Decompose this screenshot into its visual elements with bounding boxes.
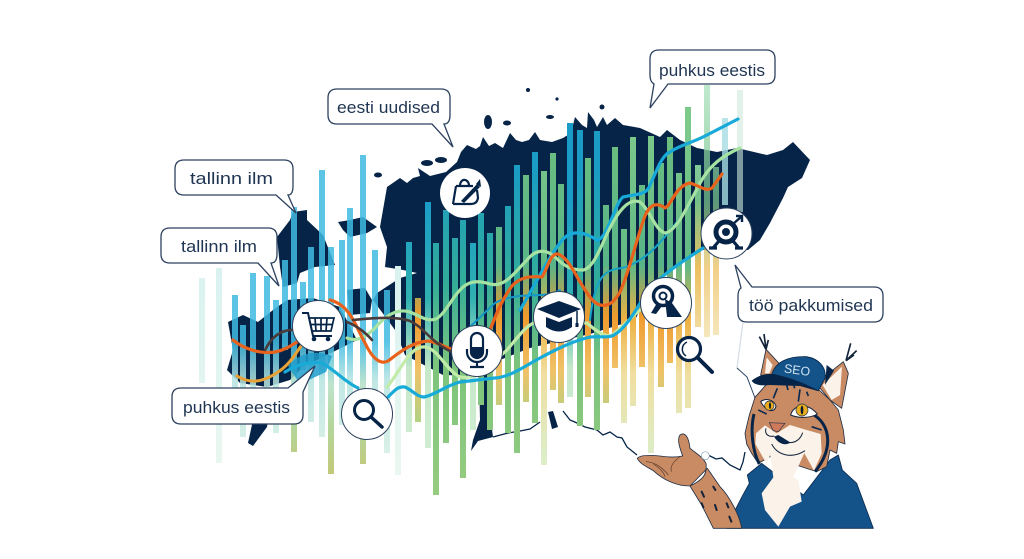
- lynx: shirt: [727, 455, 873, 528]
- map: islets: [374, 88, 604, 429]
- map: mainland: [373, 112, 810, 451]
- callout: puhkus eestis lower: [172, 366, 315, 424]
- lynx: left eye: [761, 400, 776, 411]
- border line to hand: [493, 411, 745, 470]
- line: lower blue: [285, 248, 703, 397]
- lynx: right eye: [791, 404, 817, 417]
- bar chart: [199, 85, 743, 495]
- line: orange centre: [330, 300, 455, 362]
- map: middle island: [347, 288, 372, 315]
- line: pale green upper: [347, 148, 740, 340]
- line: upper blue: [520, 119, 738, 310]
- lynx: cap: [752, 357, 834, 391]
- lynx: face stripes: [752, 414, 828, 472]
- icon: magnifier: [678, 338, 712, 372]
- lynx: arm spots: [702, 487, 731, 522]
- lynx: nose and mouth: [766, 423, 805, 455]
- trend lines: [233, 119, 740, 397]
- lynx: cuff: [701, 452, 709, 460]
- lynx: head: [745, 377, 845, 472]
- lynx: ear tufts: [759, 334, 857, 361]
- eastern border near lynx: [737, 368, 755, 398]
- map of Estonia: [227, 88, 810, 451]
- icon: microphone: [452, 326, 502, 376]
- map: lower-left island: [227, 298, 357, 387]
- line: orange: [490, 174, 722, 330]
- callout: töö pakkumised: [735, 265, 883, 322]
- pale eastern border: [737, 322, 743, 368]
- icon: edit pen: [440, 168, 490, 218]
- icon: shopping cart: [292, 300, 344, 352]
- callout: töö pakkumised: töö pakkumised: [749, 296, 873, 315]
- callout: tallinn ilm lower: tallinn ilm: [181, 237, 257, 256]
- line: pale green lower: [387, 310, 640, 387]
- map: island tail: [248, 420, 268, 446]
- lynx: inner ear: [823, 367, 842, 400]
- lynx: forehead marks: [758, 383, 822, 430]
- line: brown: [265, 318, 452, 352]
- line: thin blue: [466, 290, 560, 330]
- callout: tallinn ilm upper: [175, 160, 296, 213]
- icon: target click: [640, 278, 692, 328]
- callout: tallinn ilm lower: [161, 228, 279, 286]
- callout: tallinn ilm upper: tallinn ilm: [190, 169, 273, 188]
- callout: eesti uudised: [328, 89, 453, 147]
- callout: puhkus eestis lower: puhkus eestis: [183, 398, 290, 417]
- icon: search circle: [342, 388, 392, 440]
- lynx: left ear: [761, 349, 779, 378]
- lynx: right ear: [816, 362, 848, 408]
- lynx: chest fur: [762, 452, 805, 527]
- lynx: left inner ear: [765, 357, 773, 373]
- lynx: cap: SEO: [783, 361, 811, 379]
- map: upper island: [277, 210, 335, 287]
- teal island blob: [288, 353, 332, 384]
- line: amber: [237, 346, 301, 381]
- icon: target mars: [701, 208, 752, 259]
- lynx: muzzle: [755, 425, 822, 471]
- lynx mascot: [637, 334, 873, 528]
- lynx: arm and hand: [637, 434, 742, 528]
- callout: puhkus eestis upper: [650, 50, 775, 108]
- lynx: finger creases: [646, 457, 680, 477]
- icon: graduation cap: [534, 292, 584, 342]
- callout: puhkus eestis upper: puhkus eestis: [659, 61, 765, 80]
- callout: eesti uudised: eesti uudised: [337, 98, 440, 117]
- map: small island: [338, 217, 377, 237]
- line: orange left: [233, 340, 297, 352]
- line: thin blue mid: [590, 205, 690, 320]
